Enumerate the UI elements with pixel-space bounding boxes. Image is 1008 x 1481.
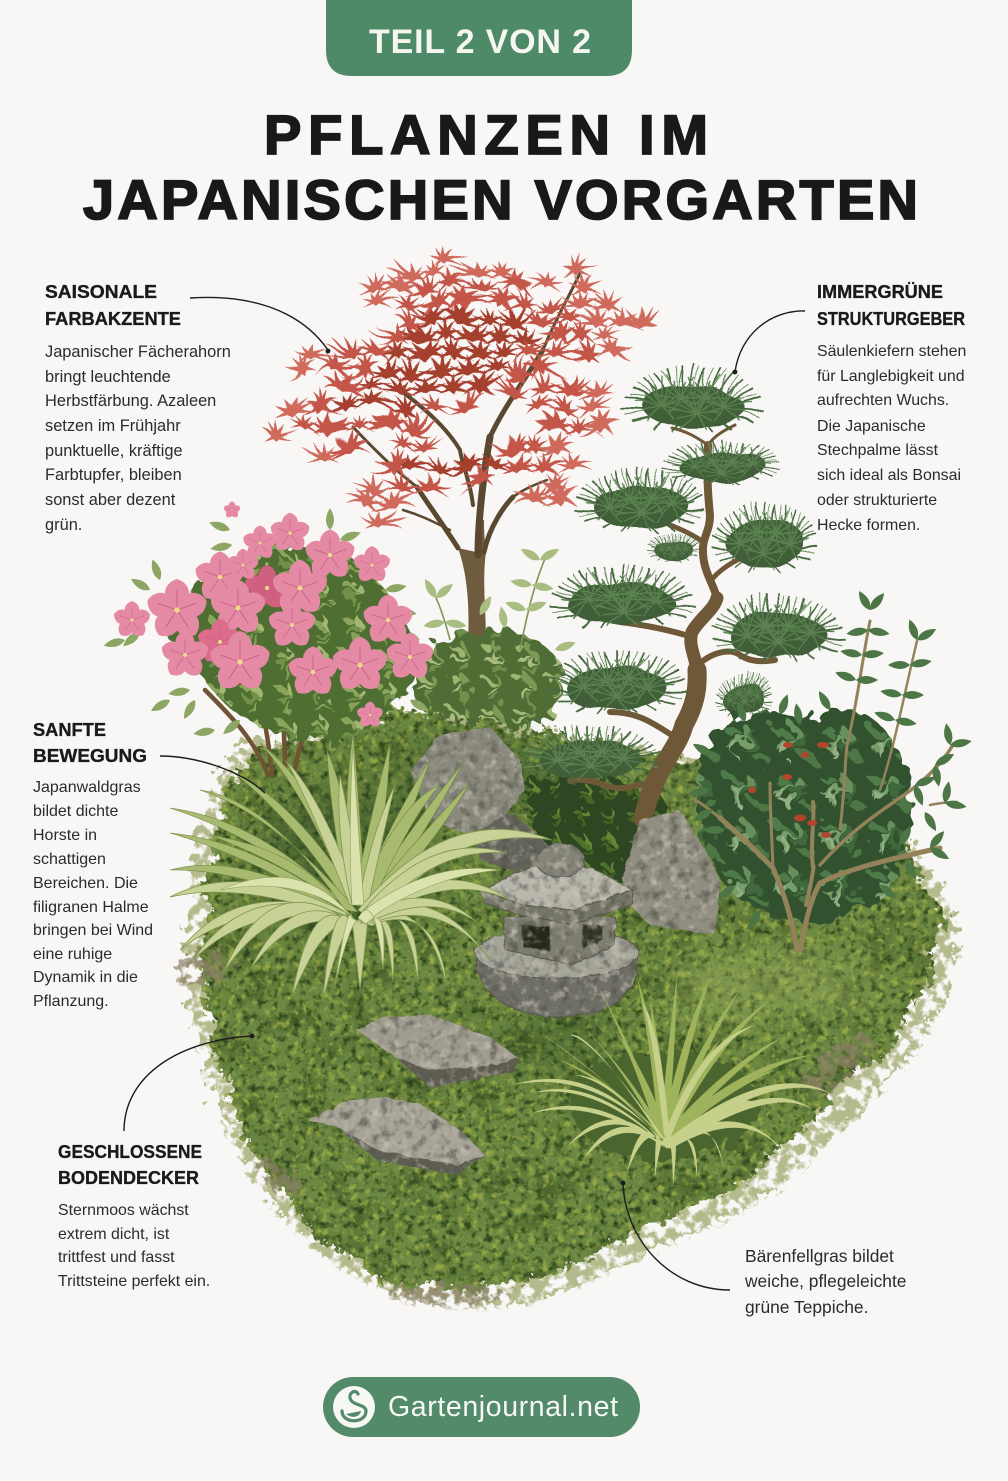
title: JAPANISCHEN VORGARTEN (83, 168, 918, 231)
heading: Sanfte Bewegung: BEWEGUNG (33, 745, 147, 766)
text: star moss: trittfest und fasst (58, 1249, 175, 1266)
text: maple and azalea: sonst aber dezent (45, 491, 176, 509)
leader line: forest grass (160, 756, 265, 793)
stepping stones (308, 1015, 520, 1175)
text: pine and holly: sich ideal als Bonsai (817, 467, 961, 484)
moss shading (255, 740, 880, 1070)
footer pill: Gartenjournal.net: Gartenjournal.net (388, 1391, 618, 1423)
text: pine and holly: Säulenkiefern stehen (817, 343, 966, 360)
text: maple and azalea: Herbstfärbung. Azaleen (45, 392, 216, 410)
text: bear fescue: grüne Teppiche. (745, 1297, 868, 1317)
illustration: japanese front garden (103, 245, 972, 1310)
callout: Geschlossene Bodendecker (58, 1034, 254, 1290)
text: maple and azalea: setzen im Frühjahr (45, 417, 181, 435)
text: bear fescue: weiche, pflegeleichte (744, 1271, 906, 1291)
text: maple and azalea: Japanischer Fächerahorn (45, 343, 231, 361)
heading: Saisonale Farbakzente: SAISONALE (45, 281, 157, 302)
japanese forest grass (170, 733, 552, 1000)
callout: Sanfte Bewegung (33, 719, 265, 1010)
heading: Geschlossene Bodendecker: GESCHLOSSENE (58, 1141, 202, 1162)
pine tree (519, 364, 846, 818)
garden rocks (410, 727, 720, 935)
callout: Bärenfellgras (621, 1181, 906, 1317)
heading: Geschlossene Bodendecker (58, 1141, 202, 1188)
text: pine and holly: für Langlebigkeit und (817, 368, 965, 385)
bear fescue grass (513, 977, 830, 1187)
text: star moss: extrem dicht, ist (58, 1226, 170, 1243)
ground fringe (186, 710, 957, 1310)
text: forest grass: bildet dichte (33, 803, 118, 820)
icon: logo (333, 1386, 375, 1428)
heading: Immergrüne Strukturgeber: IMMERGRÜNE (817, 281, 943, 302)
leader line: bear fescue (621, 1181, 730, 1290)
text: bear fescue: Bärenfellgras bildet (745, 1246, 894, 1266)
heading: Immergrüne Strukturgeber (817, 281, 965, 329)
heading: Sanfte Bewegung (33, 719, 147, 766)
text: forest grass: Pflanzung. (33, 993, 109, 1010)
text: forest grass: Dynamik in die (33, 969, 138, 986)
text: pine and holly: Hecke formen. (817, 517, 920, 534)
stone lantern (475, 843, 639, 1017)
holly shrub (688, 589, 972, 950)
moss ground (203, 710, 939, 1292)
text: forest grass: filigranen Halme (33, 899, 149, 916)
heading: Saisonale Farbakzente (45, 281, 181, 329)
text: forest grass: schattigen (33, 851, 106, 868)
text: pine and holly: oder strukturierte (817, 492, 937, 509)
text: maple and azalea: punktuelle, kräftige (45, 442, 183, 460)
bare soil patches (175, 952, 888, 1307)
badge: Teil 2 von 2 (326, 0, 632, 76)
text: forest grass: Horste in (33, 827, 97, 844)
badge: Teil 2 von 2: TEIL 2 VON 2 (369, 23, 591, 61)
callout: Immergrüne Strukturgeber (733, 281, 966, 534)
heading: Geschlossene Bodendecker: BODENDECKER (58, 1167, 199, 1188)
heading: Sanfte Bewegung: SANFTE (33, 719, 106, 740)
text: pine and holly: Die Japanische (817, 418, 926, 435)
text: forest grass: Bereichen. Die (33, 875, 138, 892)
text: star moss: Trittsteine perfekt ein. (58, 1273, 210, 1290)
leader line: maple (190, 297, 330, 353)
leader line: pine (733, 311, 805, 374)
text: maple and azalea: Farbtupfer, bleiben (45, 466, 182, 484)
dark moss behind lantern (525, 778, 665, 890)
heading: Immergrüne Strukturgeber: STRUKTURGEBER (817, 308, 965, 329)
text: pine and holly: Stechpalme lässt (817, 442, 939, 459)
text: maple and azalea: bringt leuchtende (45, 368, 171, 386)
text: forest grass: eine ruhige (33, 946, 112, 963)
pale background shrub behind rocks (398, 546, 577, 741)
maple tree (261, 245, 656, 640)
title (83, 103, 918, 231)
text: pine and holly: aufrechten Wuchs. (817, 392, 949, 409)
text: maple and azalea: grün. (45, 516, 82, 534)
text: forest grass: Japanwaldgras (33, 779, 141, 796)
azalea shrub (103, 501, 436, 775)
heading: Saisonale Farbakzente: FARBAKZENTE (45, 308, 181, 329)
callout: Saisonale Farbakzente (45, 281, 330, 534)
title: PFLANZEN IM (264, 103, 708, 166)
footer pill: Gartenjournal.net (323, 1377, 640, 1437)
text: forest grass: bringen bei Wind (33, 922, 153, 939)
text: star moss: Sternmoos wächst (58, 1202, 189, 1219)
leader line: moss (124, 1034, 254, 1131)
